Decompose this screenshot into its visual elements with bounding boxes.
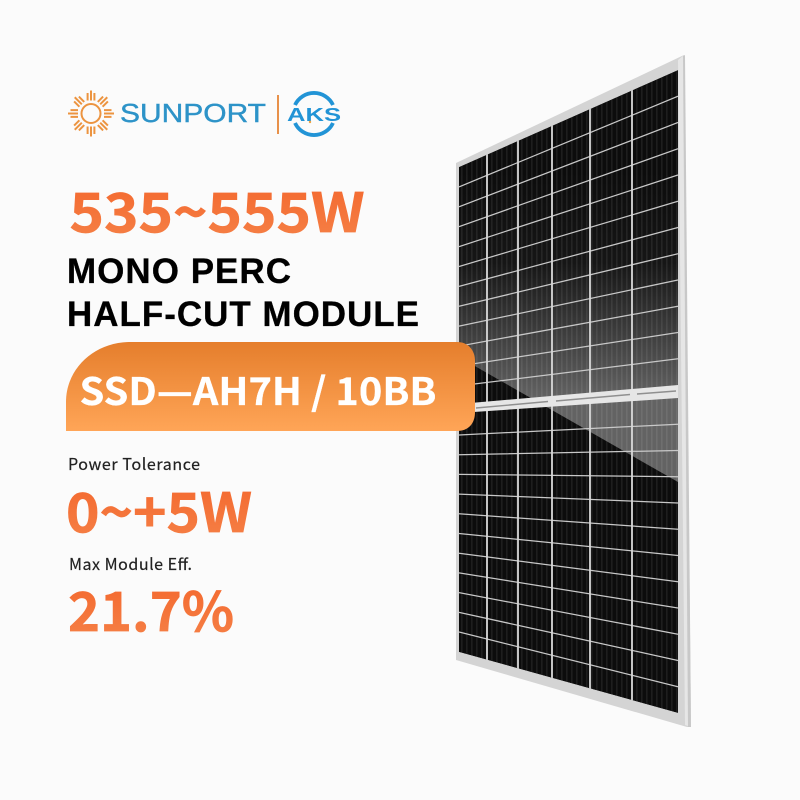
panel frame xyxy=(456,55,691,727)
title line 2: HALF-CUT MODULE xyxy=(67,295,419,334)
logo: sunport xyxy=(68,90,266,136)
wordmark: SUNPORT xyxy=(120,98,266,128)
max efficiency label: Max Module Eff. xyxy=(69,551,192,575)
glass reflection xyxy=(459,250,678,482)
banner shape xyxy=(66,342,475,431)
centre junction band xyxy=(475,385,678,412)
power tolerance label: Power Tolerance xyxy=(68,451,200,475)
max efficiency value: 21.7% xyxy=(68,568,234,647)
model banner xyxy=(66,342,475,431)
cell row lines xyxy=(459,96,678,687)
AKS letters: AKS xyxy=(287,104,341,125)
model text: SSD—AH7H / 10BB xyxy=(80,361,436,416)
cell column lines xyxy=(487,60,632,720)
ring xyxy=(295,93,333,135)
power tolerance value: 0~+5W xyxy=(66,469,252,548)
product title xyxy=(67,252,419,334)
logo: AKS xyxy=(287,93,341,135)
photovoltaic cells xyxy=(459,60,678,720)
icon: sun xyxy=(68,90,114,136)
title line 1: MONO PERC xyxy=(67,252,291,291)
accent dot xyxy=(309,121,311,123)
solar panel xyxy=(456,55,691,727)
headline wattage: 535~555W xyxy=(70,169,364,248)
logo divider xyxy=(277,95,279,134)
infographic canvas xyxy=(66,55,691,727)
